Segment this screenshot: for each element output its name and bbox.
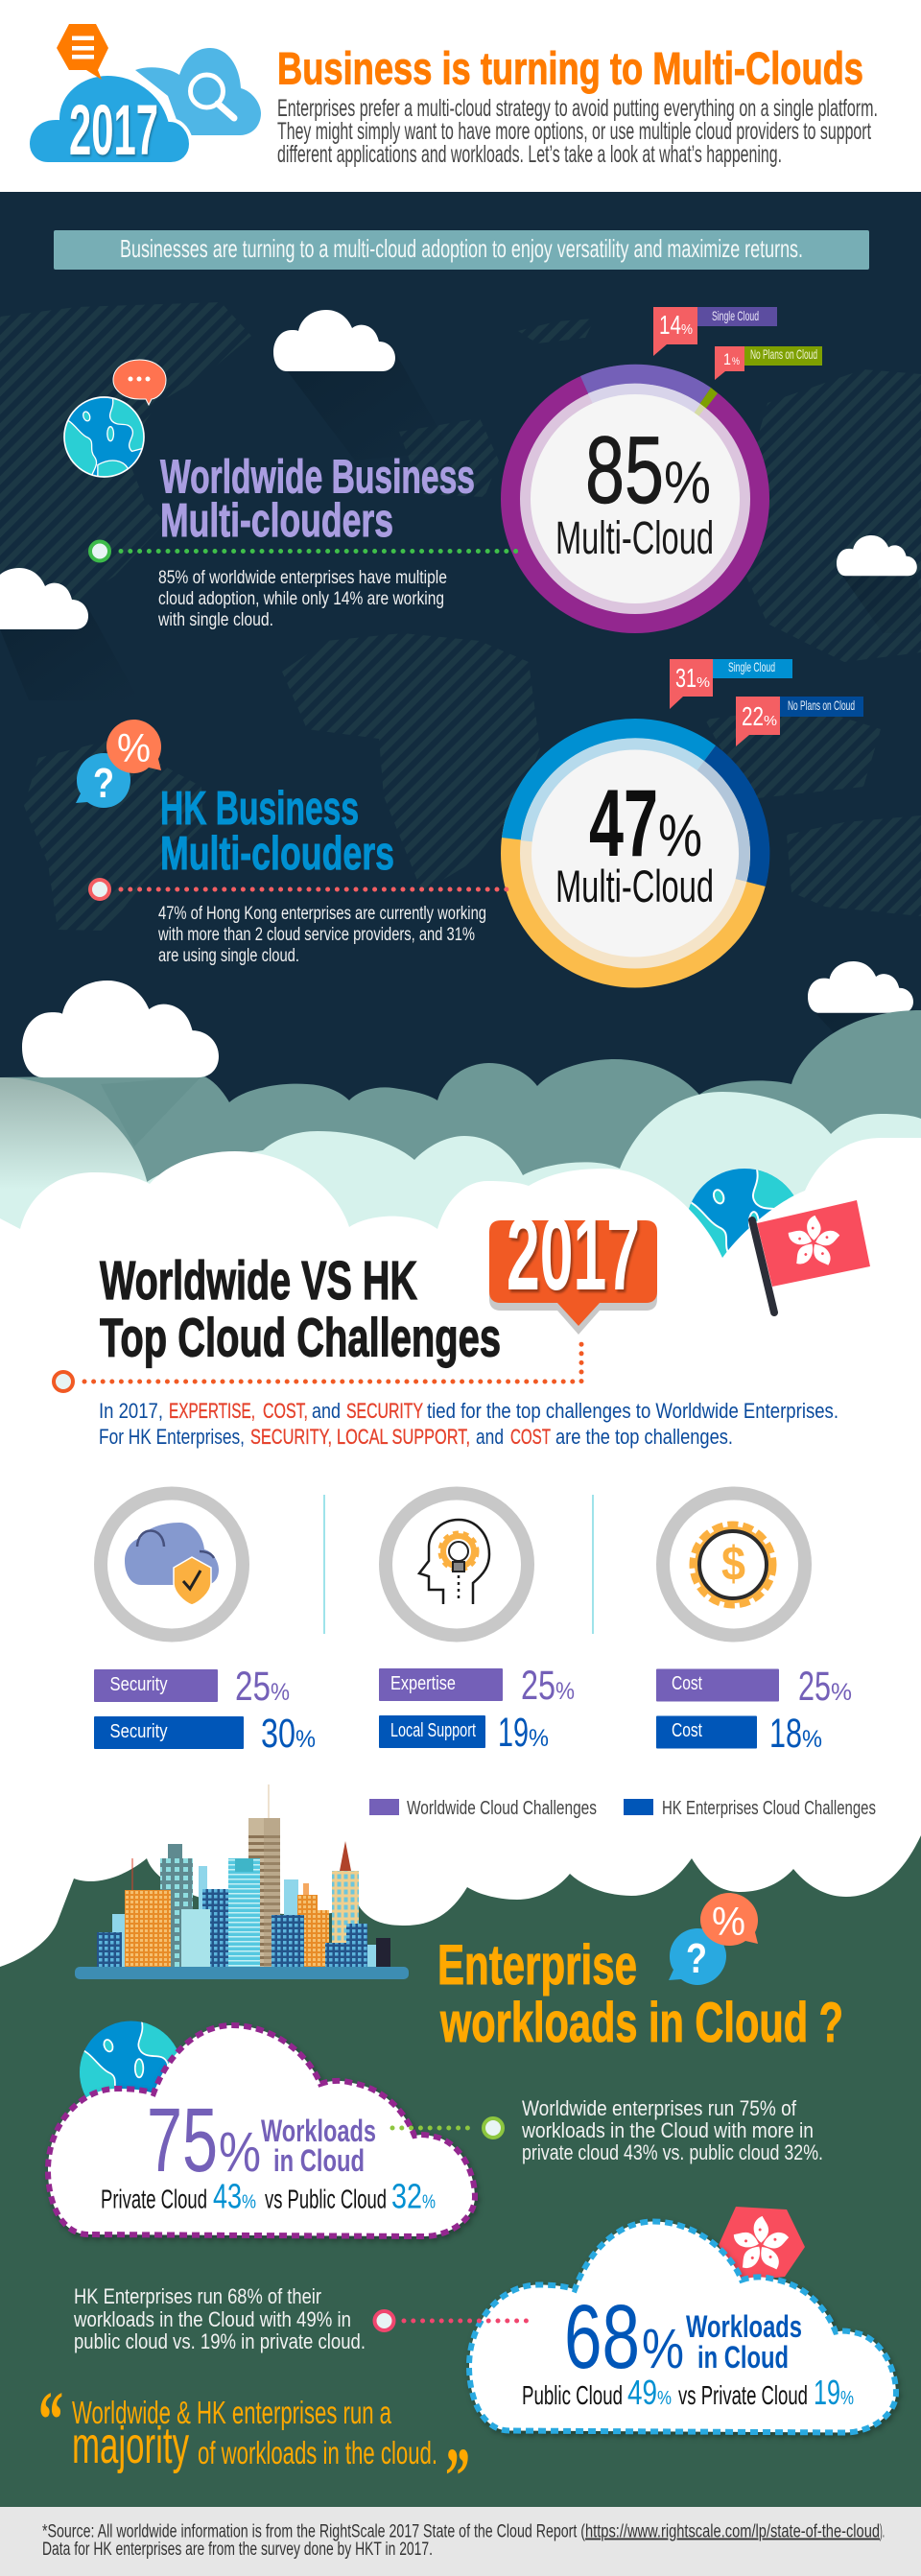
bars: security: %: [295, 1726, 316, 1753]
icon: Hong Kong flag: [752, 1200, 870, 1312]
bars: cost: 18: [769, 1711, 802, 1757]
bars: expertise and local support: [379, 1663, 575, 1756]
banner: [54, 230, 869, 270]
bars: cost: %: [802, 1726, 822, 1753]
icon: Hong Kong hexagon badge: [719, 2207, 805, 2281]
donut chart: HK 47%: %: [658, 803, 702, 869]
callout: 14% single cloud: 14: [659, 310, 681, 340]
world map background: [0, 302, 921, 931]
cloud panel: HK 68%: [469, 2222, 896, 2433]
cloud panel: HK 68%: Workloads: [686, 2309, 802, 2344]
cloud: right lower: [808, 961, 921, 1065]
illustration: city skyline: [75, 1784, 409, 1979]
quote: [38, 2375, 470, 2521]
text: worldwide description: 85% of worldwide enterprises have multiple: [158, 567, 447, 588]
bars: security: Security: [109, 1674, 167, 1695]
text: HK description: [157, 903, 486, 966]
bars: security: 30: [261, 1711, 295, 1757]
heading: worldwide: [160, 451, 475, 547]
text: challenges summary: SECURITY: [346, 1399, 423, 1423]
heading: HK: HK Business: [160, 783, 359, 835]
callout: 31% single cloud: 31: [675, 663, 697, 693]
donut chart: worldwide 85%: [501, 365, 769, 633]
quote: “: [38, 2375, 63, 2465]
heading: top cloud challenges: Worldwide VS HK: [100, 1250, 417, 1312]
intro paragraph: [277, 95, 878, 168]
icon: security cloud shield: [101, 1493, 243, 1635]
text: challenges summary: For HK Enterprises,: [99, 1425, 245, 1449]
text: challenges summary: COST: [510, 1425, 551, 1449]
text: worldwide description: [157, 567, 447, 630]
heading: worldwide: Worldwide Business: [160, 451, 475, 503]
cloud panel: HK 68%: in Cloud: [697, 2340, 789, 2375]
icon: globe behind flag: [674, 1167, 820, 1297]
callout: 22% no plans on cloud: 22: [742, 701, 764, 731]
donut chart: HK 47%: [501, 719, 769, 988]
cloud: left: [0, 568, 139, 700]
cloud: right: [837, 535, 921, 633]
panel: green workloads section: [0, 1784, 921, 2521]
text: challenges summary: tied for the top challenges to Worldwide Enterprises.: [427, 1399, 838, 1423]
cloud panel: HK 68%: %: [657, 2388, 672, 2409]
cloud panel: HK 68%: %: [642, 2318, 684, 2380]
bars: expertise and local support: %: [555, 1678, 575, 1705]
connector: orange dotted line: [54, 1342, 581, 1391]
cloud: top centre: [273, 310, 451, 461]
callout: 14% single cloud: Single Cloud: [712, 308, 759, 323]
bars: security: %: [271, 1679, 290, 1706]
heading: HK: Multi-clouders: [160, 828, 394, 880]
footer source note: [0, 2507, 921, 2576]
bars: security: Security: [109, 1721, 167, 1742]
panel: dark multi-cloud adoption section: [0, 192, 921, 1151]
text: HK description: are using single cloud.: [158, 945, 299, 966]
header: [28, 24, 878, 170]
bars: cost: %: [831, 1679, 852, 1706]
donut chart: HK 47%: Multi-Cloud: [555, 861, 714, 911]
text: worldwide description: cloud adoption, while only 14% are working: [158, 588, 444, 609]
donut chart: HK 47%: 47: [589, 769, 658, 876]
quote: of workloads in the cloud.: [198, 2435, 437, 2470]
text: HK workloads: workloads in the Cloud with 49% in: [73, 2307, 351, 2331]
cloud panel: worldwide 75%: [48, 2025, 475, 2236]
cloud panel: worldwide 75%: Workloads: [261, 2114, 376, 2148]
text: worldwide workloads: private cloud 43% vs. public cloud 32%.: [522, 2140, 823, 2164]
cloud panel: HK 68%: 19: [814, 2373, 840, 2412]
icon: question and percent bubbles: %: [117, 725, 151, 770]
bars: expertise and local support: 25: [521, 1663, 555, 1709]
text: challenges summary: SECURITY,: [250, 1425, 332, 1449]
callout: 22% no plans on cloud: No Plans on Cloud: [788, 697, 855, 713]
bars: cost: [656, 1664, 852, 1757]
heading: enterprise workloads: [437, 1934, 843, 2054]
cloud: bottom left large: [22, 981, 219, 1077]
heading: top cloud challenges: [100, 1250, 501, 1368]
text: HK description: 47% of Hong Kong enterprises are currently working: [158, 903, 486, 924]
legend: Worldwide Cloud Challenges: [407, 1797, 597, 1819]
callout: 22% no plans on cloud: %: [764, 713, 777, 729]
text: challenges summary: are the top challenges.: [555, 1425, 733, 1449]
text: challenges summary: [99, 1399, 838, 1449]
panel: top cloud challenges: [54, 1195, 876, 1819]
icon: question and percent bubbles: ?: [93, 760, 114, 807]
legend: [369, 1797, 876, 1819]
cloud panel: worldwide 75%: vs Public Cloud: [265, 2184, 387, 2214]
bars: cost: 25: [798, 1664, 831, 1710]
text: HK workloads: [73, 2284, 366, 2353]
icon: question and percent bubbles: [76, 720, 161, 808]
text: HK workloads: public cloud vs. 19% in private cloud.: [74, 2329, 366, 2353]
cloud panel: HK 68%: Public Cloud: [522, 2380, 623, 2410]
cloud panel: HK 68%: vs Private Cloud: [678, 2380, 808, 2410]
panel: layered cloud transition: [0, 1010, 921, 1880]
cloud panel: HK 68%: 49: [627, 2373, 657, 2412]
text: worldwide workloads: Worldwide enterprises run 75% of: [522, 2096, 797, 2120]
text: challenges summary: EXPERTISE,: [169, 1399, 255, 1423]
heading: top cloud challenges: Top Cloud Challenges: [100, 1307, 501, 1368]
bars: security: [94, 1664, 316, 1757]
badge: 2017: [489, 1195, 657, 1335]
icon: orange hexagon speech bubble: [57, 24, 108, 80]
callout: 31% single cloud: %: [697, 674, 710, 691]
text: challenges summary: COST,: [263, 1399, 308, 1423]
heading: enterprise workloads: Enterprise: [437, 1934, 637, 1997]
icon: question and percent bubbles: ?: [686, 1935, 707, 1982]
cloud panel: worldwide 75%: Private Cloud: [101, 2184, 207, 2214]
icon: header clouds with 2017: [28, 48, 261, 170]
icon: dollar gear: $: [721, 1537, 745, 1591]
icon: dollar gear: [663, 1493, 805, 1635]
icon: globe with speech bubble: [57, 360, 166, 484]
text: challenges summary: and: [312, 1399, 341, 1423]
cloud panel: HK 68%: %: [840, 2388, 854, 2409]
cloud panel: worldwide 75%: 32: [391, 2176, 422, 2216]
icon: head with lightbulb: [386, 1493, 528, 1635]
heading: HK: [160, 783, 394, 880]
text: HK workloads: HK Enterprises run 68% of their: [74, 2284, 321, 2308]
text: challenges summary: LOCAL SUPPORT,: [337, 1425, 470, 1449]
icon: question and percent bubbles: [669, 1893, 758, 1985]
quote: ”: [445, 2432, 470, 2521]
icon: header clouds with 2017: 2017: [69, 90, 158, 170]
cloud panel: worldwide 75%: 43: [213, 2176, 242, 2216]
connector: red dotted line: [90, 880, 512, 899]
callout: 31% single cloud: [670, 659, 792, 709]
cloud panel: worldwide 75%: in Cloud: [273, 2143, 365, 2178]
quote: majority: [72, 2417, 189, 2474]
donut chart: worldwide 85%: %: [664, 450, 711, 516]
connector: pink dotted line: [374, 2311, 529, 2330]
connector: lime dotted line: [392, 2118, 503, 2138]
callout: 22% no plans on cloud: [736, 697, 863, 746]
donut chart: worldwide 85%: Multi-Cloud: [555, 513, 714, 564]
bars: security: 25: [235, 1664, 271, 1710]
text: challenges summary: In 2017,: [99, 1399, 163, 1423]
footer source note: Data for HK enterprises are from the survey done by HKT in 2017.: [42, 2540, 433, 2560]
callout: 1% no plans on cloud: %: [732, 356, 740, 367]
bars: expertise and local support: Local Support: [390, 1720, 476, 1741]
callout: 1% no plans on cloud: [715, 346, 822, 380]
bars: expertise and local support: 19: [498, 1710, 529, 1756]
cloud panel: worldwide 75%: 75: [147, 2090, 218, 2191]
cloud panel: worldwide 75%: %: [242, 2191, 256, 2212]
icon: globe behind cloud: [69, 2019, 198, 2134]
connector: green dotted line: [90, 541, 522, 560]
text: worldwide workloads: workloads in the Cloud with more in: [521, 2118, 814, 2142]
callout: 14% single cloud: [653, 307, 777, 356]
callout: 14% single cloud: %: [681, 321, 693, 338]
text: worldwide description: with single cloud.: [157, 609, 273, 630]
text: HK description: with more than 2 cloud service providers, and 31%: [157, 924, 475, 945]
callout: 1% no plans on cloud: No Plans on Cloud: [750, 346, 817, 362]
cloud panel: worldwide 75%: %: [422, 2191, 436, 2212]
icon: question and percent bubbles: %: [712, 1899, 745, 1944]
bars: expertise and local support: %: [529, 1725, 549, 1752]
bars: cost: Cost: [672, 1673, 702, 1694]
quote: Worldwide & HK enterprises run a: [72, 2395, 391, 2430]
badge: 2017: 2017: [507, 1195, 640, 1312]
donut chart: worldwide 85%: 85: [585, 416, 664, 523]
text: worldwide workloads: [521, 2096, 823, 2164]
footer source note: *Source: All worldwide information is from the RightScale 2017 State of the Cloud Report (: [42, 2521, 586, 2542]
cloud panel: HK 68%: 68: [564, 2286, 640, 2388]
cloud panel: worldwide 75%: %: [219, 2121, 261, 2184]
bars: cost: Cost: [672, 1720, 702, 1741]
callout: 1% no plans on cloud: 1: [723, 350, 731, 368]
heading: worldwide: Multi-clouders: [160, 495, 393, 547]
footer source note: ).: [880, 2521, 885, 2542]
bars: expertise and local support: Expertise: [390, 1673, 456, 1694]
text: challenges summary: and: [476, 1425, 504, 1449]
page background: header white: [0, 0, 921, 192]
callout: 31% single cloud: Single Cloud: [728, 659, 775, 674]
